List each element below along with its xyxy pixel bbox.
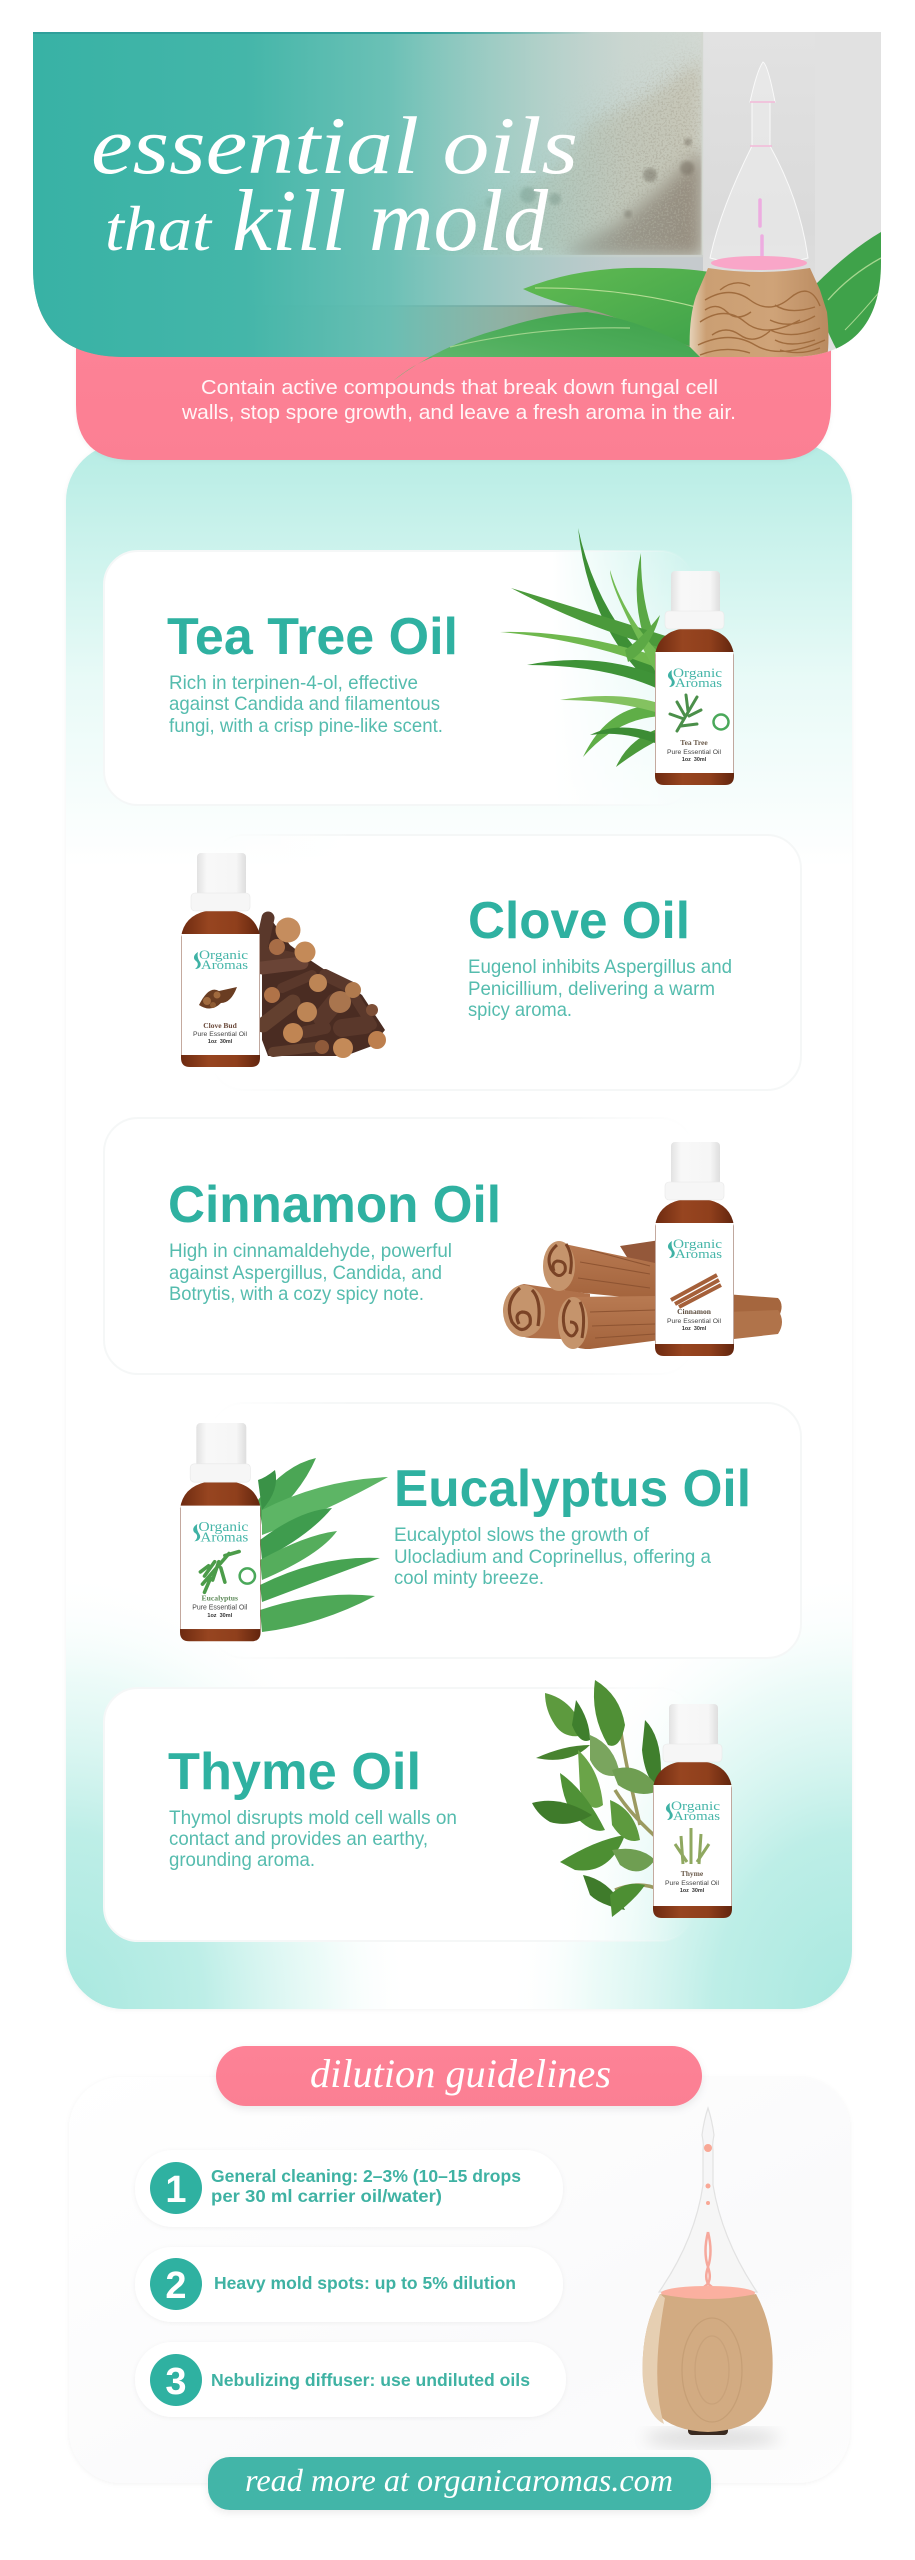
description: eucalyptus oil: Eucalyptol slows the growth of: [394, 1524, 650, 1546]
title: essential oils: [91, 100, 578, 191]
title: kill mold: [232, 173, 549, 270]
description: clove oil: Eugenol inhibits Aspergillus and: [468, 956, 732, 978]
bottle: tea tree: Organic: [673, 665, 722, 680]
bottle: thyme: 1oz 30ml: [680, 1888, 705, 1894]
card: thyme oil: [104, 1680, 732, 1941]
description: thyme oil: grounding aroma.: [169, 1849, 315, 1871]
heading: tea tree oil: Tea Tree Oil: [167, 608, 458, 666]
number badge 1: [150, 2162, 202, 2214]
bottle: clove: Aromas: [201, 957, 248, 972]
subtitle text: Contain active compounds that break down fungal cell: [201, 376, 718, 399]
step 1 text: [211, 2166, 521, 2206]
heading pill: dilution guidelines: [216, 2046, 702, 2106]
bottle: tea tree: 1oz 30ml: [682, 757, 707, 763]
bottle: thyme: Pure Essential Oil: [665, 1880, 719, 1887]
hero leaf overlapping banner: [393, 312, 700, 381]
bottle: eucalyptus: [180, 1423, 261, 1641]
description: tea tree oil: fungi, with a crisp pine-like scent.: [169, 715, 443, 737]
bottle: cinnamon: Organic: [673, 1236, 722, 1251]
number badge 3: 3: [165, 2361, 187, 2403]
subtitle text: walls, stop spore growth, and leave a fresh aroma in the air.: [181, 401, 736, 424]
bottle: eucalyptus: Aromas: [200, 1529, 248, 1544]
description: eucalyptus oil: Ulocladium and Coprinellus, offering a: [394, 1546, 711, 1568]
number badge 3: [150, 2354, 202, 2406]
bottle: eucalyptus: Pure Essential Oil: [192, 1605, 248, 1612]
heading: eucalyptus oil: Eucalyptus Oil: [394, 1460, 751, 1518]
bottle: cinnamon: Cinnamon: [677, 1307, 712, 1316]
icon: eucalyptus leaves: [258, 1458, 388, 1632]
bottle: clove: 1oz 30ml: [208, 1039, 233, 1045]
description: tea tree oil: [169, 672, 443, 737]
bottle: cinnamon: 1oz 30ml: [682, 1326, 707, 1332]
bottle: tea tree: Pure Essential Oil: [667, 749, 721, 756]
card: clove oil: [181, 835, 801, 1090]
bottle: thyme: Organic: [671, 1798, 720, 1813]
description: eucalyptus oil: [394, 1524, 711, 1589]
step 1 text: per 30 ml carrier oil/water): [211, 2186, 442, 2206]
description: tea tree oil: Rich in terpinen-4-ol, effective: [169, 672, 418, 694]
description: thyme oil: [169, 1807, 457, 1871]
description: cinnamon oil: Botrytis, with a cozy spicy note.: [169, 1283, 424, 1305]
bottle: eucalyptus: 1oz 30ml: [207, 1613, 233, 1619]
heading: thyme oil: Thyme Oil: [168, 1743, 421, 1801]
call to action: read more: read more at organicaromas.com: [245, 2462, 673, 2498]
bottle: clove: Clove Bud: [203, 1021, 238, 1030]
bottle: tea tree: [655, 571, 734, 785]
bottle: tea tree: Tea Tree: [680, 738, 708, 747]
number badge 2: 2: [165, 2265, 187, 2307]
bottle: cinnamon: Aromas: [675, 1246, 722, 1261]
heading pill: dilution guidelines: dilution guidelines: [310, 2051, 611, 2096]
bottle: thyme: [653, 1704, 732, 1918]
step 1: [135, 2150, 563, 2227]
card: cinnamon oil: [104, 1118, 782, 1374]
step 3: [135, 2342, 566, 2417]
step 2 text: Heavy mold spots: up to 5% dilution: [214, 2273, 516, 2293]
subtitle text: [181, 376, 736, 424]
icon: tea tree sprig: [500, 528, 680, 767]
description: cinnamon oil: High in cinnamaldehyde, powerful: [169, 1240, 452, 1262]
bottle: clove: Organic: [199, 947, 248, 962]
icon: clove pile: [262, 918, 386, 1058]
number badge 2: [150, 2258, 202, 2310]
description: clove oil: Penicillium, delivering a warm: [468, 978, 715, 1000]
step 3 text: Nebulizing diffuser: use undiluted oils: [211, 2370, 530, 2390]
bottle: eucalyptus: Organic: [198, 1519, 248, 1534]
bottle: eucalyptus: Eucalyptus: [202, 1593, 238, 1602]
bottle: thyme: Aromas: [673, 1808, 720, 1823]
step 1 text: General cleaning: 2–3% (10–15 drops: [211, 2166, 521, 2186]
card: tea tree oil: [104, 528, 734, 805]
title: [91, 100, 578, 270]
card: eucalyptus oil: [180, 1403, 801, 1658]
bottle: cinnamon: [655, 1142, 734, 1356]
heading: clove oil: Clove Oil: [468, 892, 690, 950]
bottle: cinnamon: Pure Essential Oil: [667, 1318, 721, 1325]
description: cinnamon oil: [169, 1240, 452, 1305]
panel: dilution guidelines: [69, 2077, 850, 2483]
bottle: tea tree: Aromas: [675, 675, 722, 690]
hero leaves behind diffuser: [523, 232, 881, 352]
hero diffuser: [690, 62, 828, 358]
bottle: clove: [181, 853, 260, 1067]
description: tea tree oil: against Candida and filamentous: [169, 693, 440, 715]
icon: thyme sprig: [532, 1680, 665, 1917]
hero photo: moldy wall: [33, 32, 885, 358]
step 2: [135, 2247, 563, 2322]
bottle: clove: Pure Essential Oil: [193, 1031, 247, 1038]
subtitle banner: [76, 340, 831, 460]
panel: main oils background: [66, 443, 852, 2009]
description: clove oil: [468, 956, 732, 1021]
hero banner: [33, 32, 885, 381]
description: thyme oil: Thymol disrupts mold cell walls on: [169, 1807, 457, 1829]
description: cinnamon oil: against Aspergillus, Candida, and: [169, 1262, 442, 1284]
icon: cinnamon sticks: [503, 1240, 782, 1349]
number badge 1: 1: [165, 2169, 187, 2211]
title: that: [105, 193, 213, 264]
diffuser illustration: [643, 2108, 780, 2448]
heading: cinnamon oil: Cinnamon Oil: [168, 1176, 501, 1234]
bottle: thyme: Thyme: [681, 1869, 704, 1878]
description: eucalyptus oil: cool minty breeze.: [394, 1567, 544, 1589]
description: thyme oil: contact and provides an earthy,: [169, 1828, 428, 1850]
call to action: read more: [208, 2457, 711, 2510]
description: clove oil: spicy aroma.: [468, 999, 572, 1021]
